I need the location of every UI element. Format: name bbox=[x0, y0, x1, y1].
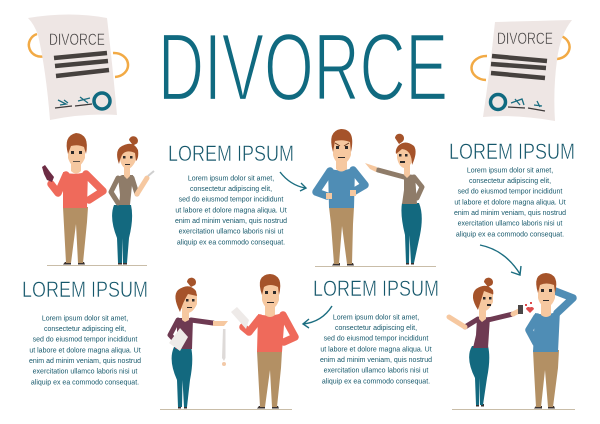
text block 4 bbox=[320, 314, 432, 386]
text block 3: sed do eiusmod tempor incididunt bbox=[33, 336, 137, 344]
woman 4 arms bbox=[170, 320, 213, 346]
text block 2: consectetur adipiscing elit, bbox=[469, 178, 551, 185]
text block 3: exercitation ullamco laboris nisi ut bbox=[33, 368, 137, 376]
ring bbox=[222, 362, 226, 366]
text block 4: enim ad minim veniam, quis nostrud bbox=[320, 357, 432, 364]
text block 4: sed do eiusmod tempor incididunt bbox=[324, 336, 428, 342]
heading 1: LOREM IPSUM bbox=[168, 141, 294, 166]
man 2 head bbox=[333, 138, 351, 172]
man 2 face bbox=[336, 146, 348, 158]
scene 4: woman handing document and man with paper bbox=[160, 274, 295, 410]
woman 2 jeans bbox=[401, 203, 422, 263]
man 4 trousers bbox=[257, 351, 282, 407]
woman 4 face bbox=[186, 299, 194, 308]
man 1 bottle bbox=[42, 165, 54, 182]
man 2 trousers bbox=[329, 207, 354, 264]
man 3 head bbox=[538, 282, 555, 317]
woman 2 arms bbox=[378, 170, 422, 198]
man 2 sweater bbox=[328, 167, 355, 208]
icon: left divorce document: DIVORCE bbox=[49, 31, 105, 49]
hearts bbox=[525, 302, 534, 313]
woman 1 head bbox=[120, 151, 136, 179]
man 3 hair bbox=[536, 273, 556, 293]
arrow 2 bbox=[480, 245, 521, 275]
icon: left divorce document bbox=[28, 14, 128, 120]
man 4 hair bbox=[260, 274, 280, 295]
man 3 trousers bbox=[533, 350, 559, 407]
heading 2: LOREM IPSUM bbox=[449, 139, 575, 164]
man 2 shoes bbox=[332, 263, 354, 266]
woman 1 shoes bbox=[118, 262, 127, 264]
text block 1: aliquip ex ea commodo consequat. bbox=[177, 240, 285, 246]
woman 1 forearm bbox=[137, 178, 147, 194]
woman 3 top bbox=[473, 317, 490, 348]
woman 2 pointing hand bbox=[365, 163, 377, 172]
woman 3 jeans bbox=[469, 346, 489, 405]
text block 3 bbox=[29, 316, 141, 386]
scene 3: man and woman with smartphone bbox=[449, 273, 575, 410]
text block 2: ut labore et dolore magna aliqua. Ut bbox=[454, 200, 566, 206]
woman 2 shoes bbox=[406, 262, 414, 264]
phone bbox=[518, 305, 523, 314]
man 4 arms bbox=[243, 315, 295, 342]
man 4 face bbox=[265, 291, 276, 303]
title: DIVORCE bbox=[158, 14, 448, 121]
man 3 arms bbox=[529, 291, 573, 343]
text block 1: Lorem ipsum dolor sit amet, bbox=[188, 176, 274, 182]
man 1 arms bbox=[51, 174, 103, 200]
icon: right divorce document bbox=[471, 20, 572, 121]
woman 1 face bbox=[123, 156, 132, 165]
text block 3: aliquip ex ea commodo consequat. bbox=[31, 380, 139, 386]
man 1 hair bbox=[67, 133, 87, 154]
scene 2: man with hands on hips and woman pointing bbox=[315, 129, 436, 266]
text block 3: consectetur adipiscing elit, bbox=[44, 326, 126, 333]
heading 3: LOREM IPSUM bbox=[22, 277, 148, 302]
man 1 shoes bbox=[63, 262, 85, 264]
arrow 1 bbox=[280, 172, 306, 191]
woman 3 hands bbox=[449, 311, 519, 327]
woman 4 jeans bbox=[172, 347, 192, 407]
text block 2: aliquip ex ea commodo consequat. bbox=[456, 232, 564, 238]
text block 1: exercitation ullamco laboris nisi ut bbox=[179, 228, 283, 236]
text block 2: enim ad minim veniam, quis nostrud bbox=[454, 210, 566, 217]
text block 3: ut labore et dolore magna aliqua. Ut bbox=[29, 348, 141, 354]
woman 1 hair bbox=[117, 136, 138, 164]
man 4 head bbox=[262, 284, 279, 317]
woman 4 hand bbox=[213, 321, 228, 326]
woman 4 top bbox=[175, 318, 193, 349]
text block 4: exercitation ullamco laboris nisi ut bbox=[324, 368, 428, 374]
text block 1: sed do eiusmod tempor incididunt bbox=[179, 196, 283, 204]
text block 1: enim ad minim veniam, quis nostrud bbox=[175, 218, 287, 225]
text block 1 bbox=[175, 176, 287, 246]
woman 2 hair bbox=[395, 134, 416, 165]
woman 3 head bbox=[477, 291, 493, 322]
man 2 arms bbox=[316, 170, 365, 196]
man 2 hair bbox=[331, 129, 352, 152]
text block 2 bbox=[454, 168, 566, 238]
man 3 sweater bbox=[533, 310, 560, 352]
man 1 head bbox=[68, 143, 85, 174]
woman 3 face bbox=[483, 297, 492, 306]
text block 2: exercitation ullamco laboris nisi ut bbox=[458, 220, 562, 228]
man 1 sweater bbox=[63, 171, 88, 208]
man 4 shoes bbox=[257, 406, 279, 408]
man 1 trousers bbox=[63, 207, 88, 263]
woman 3 hair bbox=[473, 278, 493, 310]
woman 4 shoes bbox=[178, 406, 187, 408]
man 3 face bbox=[541, 289, 552, 301]
arrow 3 bbox=[303, 306, 332, 328]
heading 4: LOREM IPSUM bbox=[313, 276, 439, 301]
text block 2: Lorem ipsum dolor sit amet, bbox=[467, 168, 553, 174]
scene 1: man with bottle and woman with cigarette bbox=[42, 133, 154, 266]
woman 4 head bbox=[180, 294, 197, 322]
woman 1 cigarette bbox=[148, 171, 154, 176]
falling ring bbox=[222, 329, 226, 361]
woman 1 jeans bbox=[112, 205, 132, 263]
woman 1 top bbox=[118, 175, 133, 205]
text block 3: enim ad minim veniam, quis nostrud bbox=[29, 358, 141, 365]
text block 3: Lorem ipsum dolor sit amet, bbox=[42, 316, 128, 322]
woman 3 arms bbox=[465, 314, 513, 327]
man 1 face bbox=[71, 151, 82, 162]
woman 4 papers bbox=[169, 328, 188, 351]
text block 1: consectetur adipiscing elit, bbox=[190, 186, 272, 193]
text block 4: Lorem ipsum dolor sit amet, bbox=[333, 314, 419, 322]
woman 2 top bbox=[402, 174, 417, 204]
man 4 paper bbox=[231, 307, 249, 329]
woman 3 shoes bbox=[476, 404, 484, 406]
woman 2 head bbox=[397, 148, 414, 178]
man 3 shoes bbox=[534, 406, 555, 408]
text block 2: sed do eiusmod tempor incididunt bbox=[458, 188, 562, 196]
man 4 sweater bbox=[257, 312, 285, 352]
woman 1 arms bbox=[111, 178, 137, 203]
text block 4: consectetur adipiscing elit, bbox=[335, 325, 417, 332]
woman 4 hair bbox=[175, 278, 197, 312]
text block 4: ut labore et dolore magna aliqua. Ut bbox=[320, 346, 432, 354]
text block 1: ut labore et dolore magna aliqua. Ut bbox=[175, 208, 287, 214]
text block 4: aliquip ex ea commodo consequat. bbox=[322, 378, 430, 386]
woman 2 face bbox=[399, 154, 408, 163]
icon: right divorce document: DIVORCE bbox=[497, 30, 553, 48]
man 2 hands bbox=[326, 190, 356, 199]
